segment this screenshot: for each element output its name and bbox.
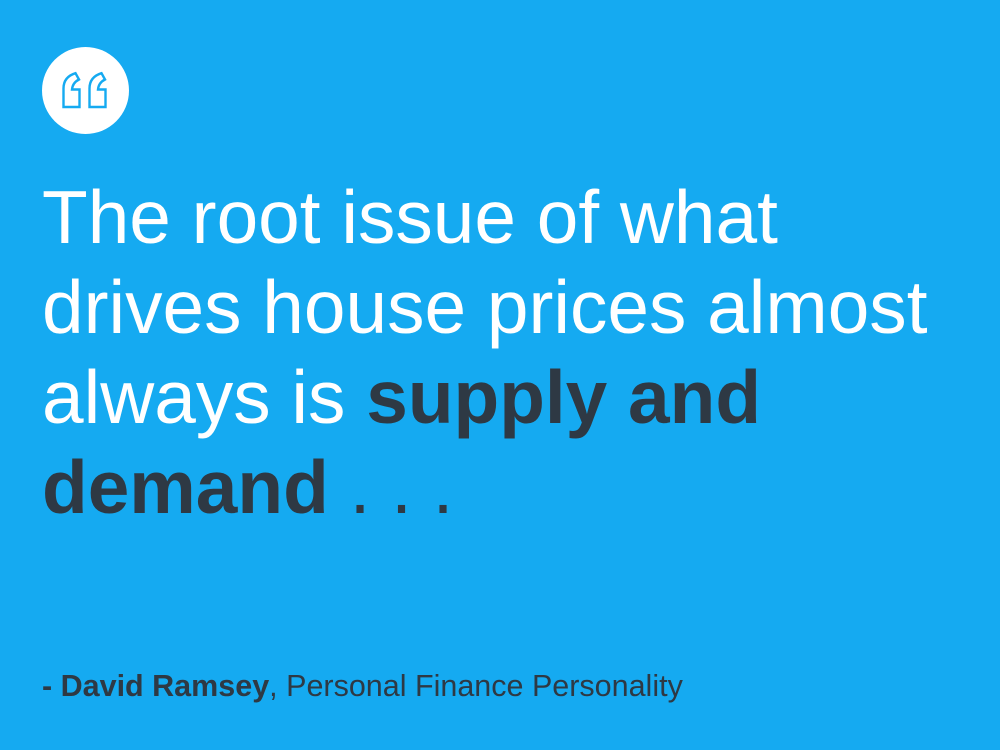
quote text: always is supply and [42, 355, 761, 439]
icon: quotation mark badge [42, 47, 129, 134]
attribution: - David Ramsey, Personal Finance Personality [42, 669, 683, 703]
quote text [42, 175, 927, 529]
quote text: drives house prices almost [42, 265, 927, 349]
quote text: demand . . . [42, 445, 453, 529]
quote text: The root issue of what [42, 175, 778, 259]
